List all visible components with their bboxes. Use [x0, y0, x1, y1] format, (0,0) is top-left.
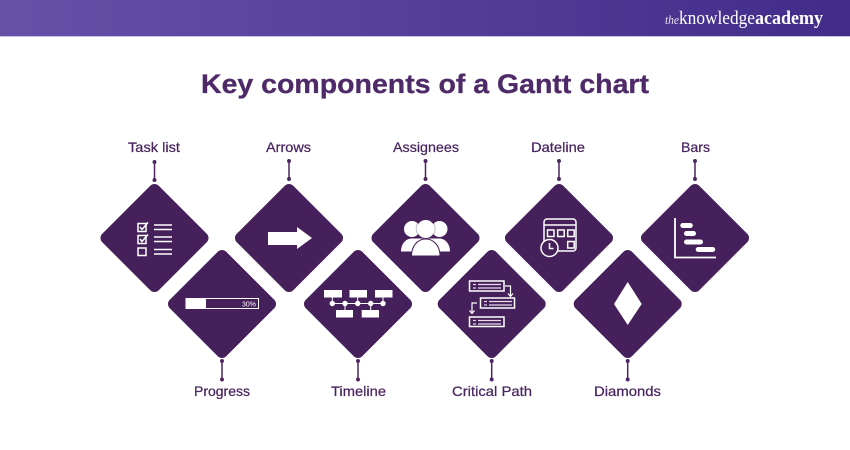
label: Task list: Task list	[128, 139, 180, 155]
diamond: Bars	[647, 190, 743, 286]
logo: the knowledge academy: academy	[755, 8, 823, 29]
icon: white diamond	[614, 282, 642, 325]
diamond: Arrows	[241, 190, 337, 286]
title: Key components of a Gantt chart	[201, 69, 649, 99]
label: Progress: Progress	[194, 383, 250, 399]
diamond: Dateline	[511, 190, 607, 286]
diamond: Task list	[106, 190, 202, 286]
logo: the knowledge academy: knowledge	[679, 8, 755, 29]
connector: Dateline	[558, 160, 560, 180]
icon: progress bar	[186, 298, 258, 308]
connector: Task list	[153, 161, 156, 181]
label: Bars: Bars	[681, 139, 710, 155]
diamond: Assignees	[378, 190, 474, 286]
icon: right arrow	[268, 227, 312, 249]
label: Arrows: Arrows	[266, 139, 311, 155]
connector: Diamonds	[626, 360, 629, 381]
icon: timeline flow	[324, 290, 392, 318]
icon: gantt bars	[675, 218, 716, 258]
item: Dateline	[511, 139, 607, 286]
item: Bars	[647, 139, 743, 286]
icon: checklist	[138, 222, 172, 256]
connector: Critical Path	[490, 360, 493, 381]
diamond: Diamonds	[580, 256, 676, 352]
diamond: Progress	[174, 256, 270, 352]
diamond: Critical Path	[444, 256, 540, 352]
logo: the knowledge academy: the	[665, 12, 679, 27]
icon: progress bar: 30%	[242, 302, 256, 308]
diamond: Timeline	[310, 256, 406, 352]
item: Diamonds	[580, 256, 676, 399]
icon: calendar with clock	[541, 219, 576, 256]
label: Dateline: Dateline	[531, 139, 585, 155]
label: Assignees: Assignees	[393, 139, 459, 155]
logo: the knowledge academy	[665, 8, 823, 29]
label: Critical Path: Critical Path	[452, 383, 532, 399]
icon: people group	[401, 219, 450, 256]
connector: Timeline	[357, 360, 359, 381]
item: Progress	[174, 256, 270, 399]
connector: Progress	[221, 360, 223, 381]
item: Arrows	[241, 139, 337, 286]
connector: Arrows	[288, 160, 290, 180]
connector: Bars	[694, 160, 696, 180]
item: Timeline	[310, 256, 406, 399]
label: Diamonds: Diamonds	[594, 383, 661, 399]
label: Timeline: Timeline	[331, 383, 386, 399]
header band	[0, 0, 850, 37]
item: Critical Path	[444, 256, 540, 399]
item: Task list	[106, 139, 202, 286]
icon: critical path tasks	[470, 281, 514, 326]
connector: Assignees	[424, 160, 427, 180]
item: Assignees	[378, 139, 474, 286]
